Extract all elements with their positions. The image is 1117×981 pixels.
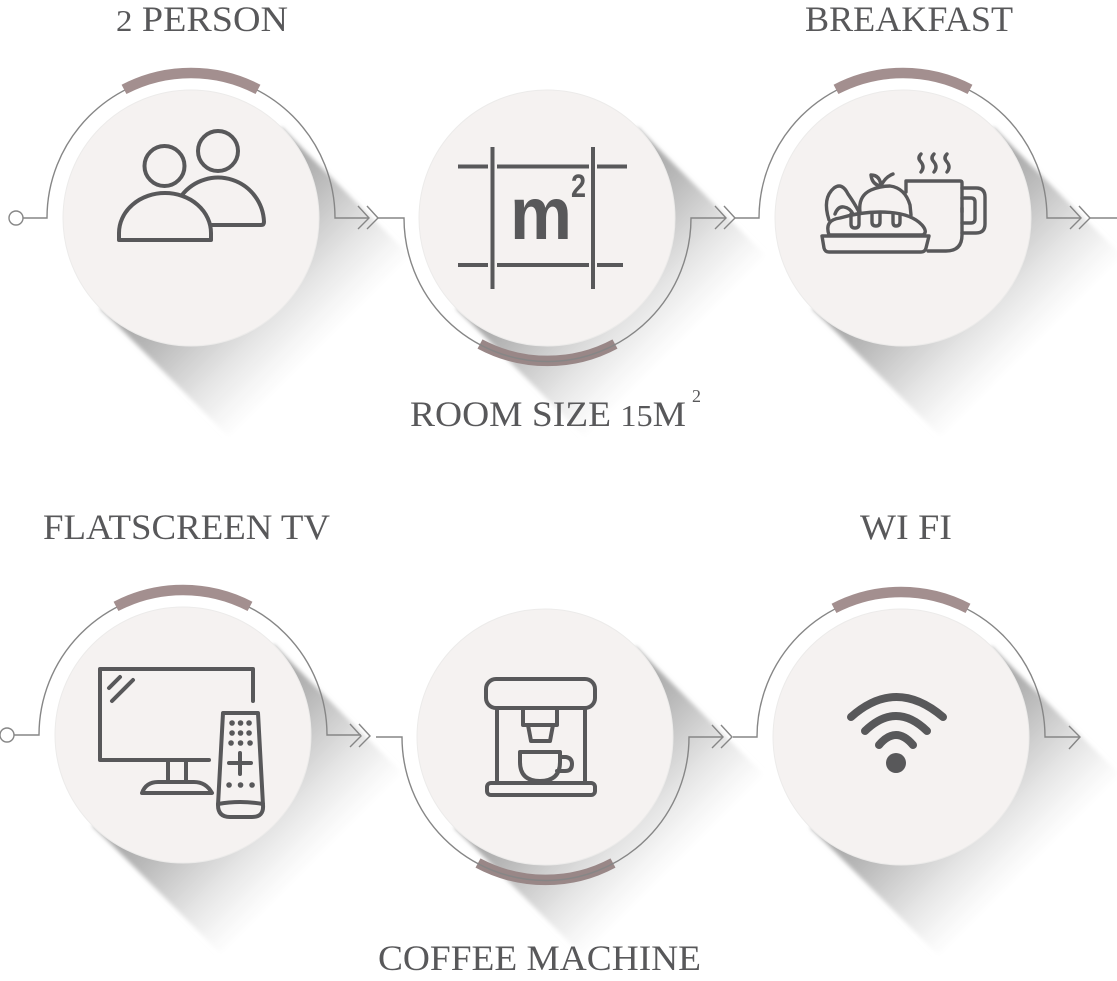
panel: room size [378,90,772,444]
panel: flatscreen tv [0,507,408,960]
start node [0,728,14,742]
icon: square metres [458,147,627,289]
long shadow: coffee machine [454,646,770,962]
arrow: double chevron 3 [1070,206,1090,229]
circle disc: room size [419,90,675,346]
top accent arc: flatscreen tv [116,590,250,606]
connector line: room size [378,218,726,361]
arrow: double chevron 4 [350,724,370,747]
top accent arc: 2 person [124,73,258,89]
icon: two people [119,131,264,240]
start node [9,211,23,225]
circle disc: wi fi [773,609,1029,865]
icon: square metres: m [510,172,572,255]
icon: coffee machine [486,679,595,795]
circle disc: flatscreen tv [55,607,311,863]
connector line: wi fi [733,593,1080,737]
icon: wifi [851,697,943,773]
arrow: end chevron [1069,726,1080,749]
panel: breakfast [735,0,1117,444]
connector line: coffee machine [376,737,723,880]
bottom accent arc: coffee machine [478,863,613,880]
top accent arc: breakfast [836,73,970,89]
icon: square metres: 2 [571,168,586,204]
label: 2 person: 2 PERSON [116,0,288,39]
long shadow: wi fi [810,646,1117,962]
long shadow: flatscreen tv [92,644,408,960]
long shadow: 2 person [100,128,416,444]
arrow: double chevron 5 [712,725,732,748]
label: coffee machine: COFFEE MACHINE [378,938,701,978]
connector line: flatscreen tv [14,591,361,735]
arrow: double chevron 2 [715,206,735,229]
arrow: double chevron 1 [358,206,378,229]
panel: wi fi [733,507,1117,962]
circle disc: 2 person [63,90,319,346]
top accent arc: wi fi [834,592,968,608]
label: room size: ROOM SIZE 15M [410,394,686,434]
icon: tv and remote [100,669,263,817]
label: wi fi: WI FI [860,507,952,547]
long shadow: breakfast [812,128,1117,444]
connector line with start node [23,74,369,218]
long shadow: room size [456,128,772,444]
connector line: breakfast [735,74,1117,218]
circle disc: coffee machine [417,609,673,865]
label: breakfast: BREAKFAST [805,0,1013,39]
label superscript: 2 [692,386,701,406]
label: flatscreen tv: FLATSCREEN TV [43,507,330,547]
bottom accent arc: room size [480,344,615,361]
icon: breakfast plate and mug [822,154,985,252]
circle disc: breakfast [775,90,1031,346]
panel: 2 person [9,0,416,444]
panel: coffee machine [376,609,770,978]
